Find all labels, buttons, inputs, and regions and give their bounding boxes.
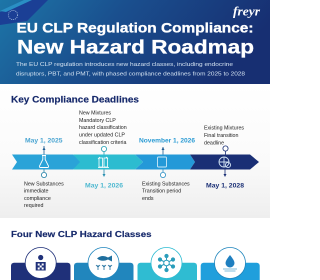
logo: freyr bbox=[233, 4, 261, 18]
card: PMT bbox=[138, 248, 197, 280]
icon: flask bbox=[39, 156, 49, 168]
header panel bbox=[0, 0, 270, 84]
milestone: May 1, 2025: immediate bbox=[24, 188, 48, 194]
title bbox=[16, 20, 254, 58]
title: New Hazard Roadmap bbox=[17, 38, 254, 58]
milestone: November 1, 2026: ends bbox=[142, 196, 154, 202]
milestone: May 1, 2025 bbox=[24, 138, 64, 209]
milestone: May 1, 2026: hazard classification bbox=[79, 125, 127, 131]
heading: deadlines: Key Compliance Deadlines bbox=[11, 94, 139, 104]
intro text: The EU CLP regulation introduces new hazard classes, including endocrine bbox=[16, 62, 233, 68]
milestone: November 1, 2026 bbox=[139, 138, 195, 202]
icon: molecule network bbox=[158, 254, 175, 272]
milestone: May 1, 2025: May 1, 2025 bbox=[25, 138, 63, 144]
title: EU CLP Regulation Compliance: bbox=[16, 20, 253, 36]
milestone: May 1, 2026: under updated CLP bbox=[79, 132, 125, 138]
intro text bbox=[16, 62, 245, 78]
milestone: May 1, 2028: deadline bbox=[204, 140, 224, 146]
milestone: May 1, 2025: compliance bbox=[24, 196, 51, 202]
heading: hazard classes: Four New CLP Hazard Classes bbox=[11, 229, 152, 239]
milestone: May 1, 2025: New Substances bbox=[24, 181, 64, 187]
icon: water drop bbox=[226, 255, 234, 268]
milestone: May 1, 2026 bbox=[79, 110, 127, 190]
card: PBT bbox=[74, 248, 134, 280]
intro text: disruptors, PBT, and PMT, with phased compliance deadlines from 2025 to 2028 bbox=[16, 72, 245, 78]
icon: person with hazard bbox=[36, 255, 46, 270]
milestone: November 1, 2026: Existing Substances bbox=[142, 182, 190, 188]
milestone: May 1, 2028: Existing Mixtures bbox=[204, 126, 244, 132]
milestone: November 1, 2026: Transition period bbox=[142, 188, 181, 194]
icon: test tubes bbox=[98, 157, 109, 168]
icon: globe gears bbox=[219, 157, 231, 168]
milestone: May 1, 2026: New Mixtures bbox=[79, 110, 111, 116]
card: endocrine disruptors bbox=[11, 248, 70, 280]
milestone: May 1, 2028: May 1, 2028 bbox=[206, 182, 244, 190]
panel: key compliance deadlines bbox=[0, 84, 270, 218]
milestone: May 1, 2025: required bbox=[24, 203, 43, 209]
icon: fish and plants bbox=[97, 256, 112, 262]
milestone: May 1, 2026: Mandatory CLP bbox=[79, 118, 116, 124]
milestone: November 1, 2026: November 1, 2026 bbox=[139, 138, 195, 144]
icon: calendar bbox=[158, 157, 166, 167]
milestone: May 1, 2028 bbox=[204, 126, 244, 190]
milestone: May 1, 2026: classification criteria bbox=[79, 140, 126, 146]
milestone: May 1, 2026: May 1, 2026 bbox=[85, 182, 123, 190]
milestone: May 1, 2028: Final transition bbox=[204, 133, 238, 139]
icon: EU flag ribbon bbox=[0, 0, 48, 25]
timeline arrow bbox=[12, 154, 259, 170]
card: vPvM bbox=[201, 248, 260, 280]
